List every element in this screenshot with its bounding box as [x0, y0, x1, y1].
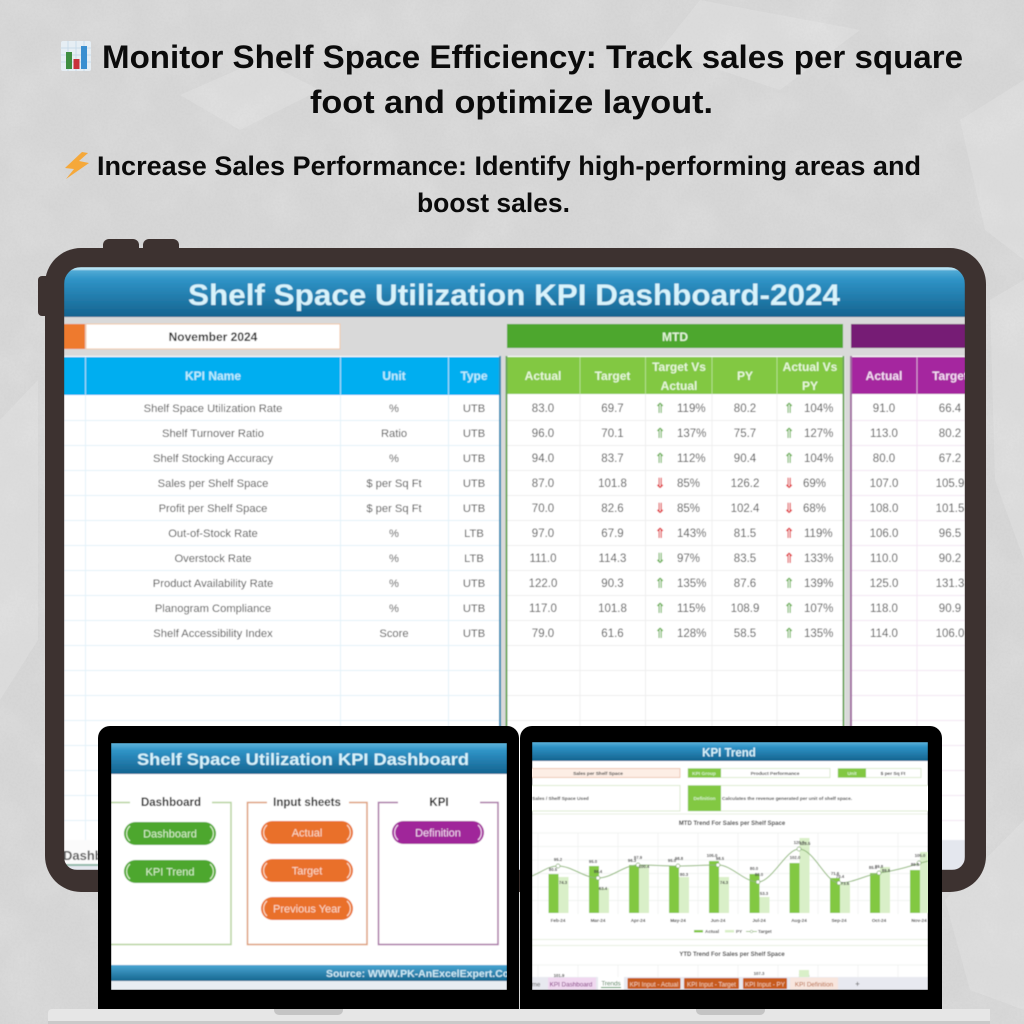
- formula and definition: Sales / Shelf Space Used: [532, 796, 589, 802]
- data labels: 74.3: [720, 880, 729, 885]
- data labels: 63.4: [599, 886, 608, 891]
- YTD table: 90.2: [939, 553, 961, 565]
- MTD table: Actual: [661, 379, 697, 393]
- source band: Source: WWW.PK-AnExcelExpert.Com: [326, 968, 519, 980]
- MTD table: 101.8: [598, 478, 627, 490]
- MTD table: 139%: [804, 578, 833, 590]
- month axis labels: Feb-24: [551, 918, 566, 923]
- MTD table: 102.4: [731, 503, 760, 515]
- title band: KPI Trend: [702, 748, 756, 760]
- MTD table: 101.8: [598, 603, 627, 615]
- sheet tabs: KPI Input - Actual: [630, 982, 678, 988]
- KPI info table: %: [389, 603, 399, 615]
- MTD table: 61.6: [601, 628, 624, 640]
- data labels: 100.4: [639, 864, 650, 869]
- KPI info table: Ratio: [381, 428, 407, 440]
- bars: Actual: [548, 861, 920, 913]
- MTD table: 143%: [677, 528, 706, 540]
- panel: Input sheets: Input sheets: [273, 797, 341, 809]
- YTD trend chart: [532, 952, 928, 978]
- panel: Dashboard: Dashboard: [141, 797, 201, 809]
- MTD table: 58.5: [734, 628, 756, 640]
- MTD table: Target Vs: [652, 360, 706, 374]
- KPI info table: Overstock Rate: [174, 553, 252, 565]
- status arrows: ⇑: [783, 576, 795, 592]
- selectors: Product Performance: [751, 771, 800, 777]
- selectors: [530, 768, 921, 778]
- formula and definition: Definition: [693, 796, 716, 802]
- data labels: 80.0: [755, 872, 764, 877]
- title band: [64, 267, 965, 317]
- status arrows: ⇓: [783, 501, 795, 517]
- MTD table: 108.9: [731, 603, 759, 615]
- button: Target: Target: [292, 866, 322, 878]
- KPI info table: UTB: [463, 478, 485, 490]
- formula and definition: Calculates the revenue generated per unit of shelf space.: [722, 796, 852, 802]
- month axis labels: Jun-24: [711, 918, 726, 923]
- MTD table: [505, 355, 846, 726]
- MTD table: 70.1: [601, 428, 624, 440]
- YTD table: 96.5: [939, 528, 961, 540]
- data labels: 80.5: [549, 867, 558, 872]
- button: Actual: [261, 821, 353, 844]
- data labels: 105.0: [915, 853, 926, 858]
- status arrows: ⇑: [654, 626, 666, 642]
- title band: Shelf Space Utilization KPI Dashboard-2024: [188, 279, 840, 312]
- MTD trend chart: MTD Trend For Sales per Shelf Space: [679, 821, 786, 827]
- status arrows: ⇓: [783, 476, 795, 492]
- status arrows: ⇑: [654, 576, 666, 592]
- YTD table: 131.3: [936, 578, 964, 590]
- KPI info table: %: [389, 578, 399, 590]
- button: Definition: [392, 821, 484, 844]
- KPI info table: %: [389, 553, 399, 565]
- data labels: 89.8: [882, 868, 891, 873]
- selectors: $ per Sq Ft: [881, 771, 906, 777]
- KPI info table: $ per Sq Ft: [366, 503, 423, 515]
- YTD trend chart: 101.9: [554, 973, 565, 978]
- YTD table: 106.0: [936, 628, 964, 640]
- data labels: 80.0: [750, 866, 759, 871]
- MTD table: 67.9: [601, 528, 624, 540]
- MTD table: PY: [737, 369, 753, 383]
- MTD table: 117.0: [529, 603, 557, 615]
- sheet tabs: KPI Dashboard: [550, 982, 593, 988]
- KPI info table: Product Availability Rate: [153, 578, 273, 590]
- MTD table: 119%: [804, 528, 833, 540]
- data labels: 95.2: [554, 857, 563, 862]
- data labels: 71.6: [831, 871, 840, 876]
- MTD table: 87.0: [532, 478, 554, 490]
- panel: Dashboard: [111, 797, 231, 944]
- month axis labels: Nov-24: [911, 918, 927, 923]
- MTD table: 96.0: [532, 428, 554, 440]
- YTD table: 108.0: [870, 503, 898, 515]
- button: Previous Year: Previous Year: [273, 904, 341, 916]
- KPI info table: Out-of-Stock Rate: [168, 528, 258, 540]
- MTD table: PY: [802, 379, 818, 393]
- data labels: 73.6: [841, 881, 850, 886]
- data labels: 105.0: [707, 853, 718, 858]
- MTD table: 90.4: [734, 453, 757, 465]
- status arrows: [654, 401, 795, 642]
- MTD table: 69.7: [601, 403, 624, 415]
- main dashboard screen: [63, 267, 968, 870]
- sheet tabs: [532, 977, 928, 990]
- laptop right: KPI trend screen: [520, 726, 942, 1009]
- KPI info table: %: [389, 403, 399, 415]
- status arrows: ⇑: [654, 451, 666, 467]
- MTD table: Actual: [525, 369, 561, 383]
- KPI info table: Unit: [382, 369, 406, 383]
- MTD banner: MTD: [662, 330, 688, 344]
- month axis labels: Jul-24: [752, 918, 766, 923]
- selectors: Sales per Shelf Space: [573, 771, 623, 777]
- sheet tabs: Trends: [601, 980, 621, 988]
- MTD table: Actual Vs: [783, 360, 838, 374]
- tablet frame: [38, 239, 986, 892]
- MTD table: 112%: [677, 453, 706, 465]
- MTD table: 97%: [677, 553, 700, 565]
- KPI info table: UTB: [463, 603, 485, 615]
- KPI info table: UTB: [463, 428, 485, 440]
- month axis labels: Mar-24: [591, 918, 606, 923]
- laptop left: navigation screen: [98, 726, 519, 1009]
- YTD table: 118.0: [870, 603, 898, 615]
- KPI info table: $ per Sq Ft: [366, 478, 423, 490]
- YTD table: [849, 355, 965, 821]
- sheet tabs: +: [855, 980, 860, 988]
- KPI info table: Score: [379, 628, 409, 640]
- status arrows: ⇑: [654, 401, 666, 417]
- KPI info table: Shelf Turnover Ratio: [162, 428, 264, 440]
- KPI info table: %: [389, 453, 399, 465]
- YTD trend chart: 108.5: [799, 973, 810, 978]
- button: Dashboard: Dashboard: [143, 828, 197, 840]
- heading: monitor shelf space efficiency: foot and optimize layout.: [310, 84, 713, 120]
- heading: monitor shelf space efficiency: [61, 39, 963, 120]
- status arrows: ⇑: [783, 601, 795, 617]
- MTD table: 90.3: [601, 578, 624, 590]
- YTD table: 114.0: [870, 628, 898, 640]
- button: KPI Trend: KPI Trend: [146, 866, 194, 878]
- MTD table: 80.2: [734, 403, 756, 415]
- data labels: 98.8: [675, 856, 684, 861]
- legend: Target: [758, 929, 772, 934]
- legend: Actual: [705, 929, 719, 934]
- month axis labels: Oct-24: [872, 918, 887, 923]
- status arrows: ⇓: [654, 501, 666, 517]
- MTD banner: [507, 324, 843, 348]
- MTD table: 94.0: [532, 453, 554, 465]
- month axis labels: [551, 918, 927, 923]
- MTD table: 75.7: [734, 428, 756, 440]
- data labels: 120.0: [794, 840, 805, 845]
- data labels: 96.3: [628, 858, 637, 863]
- sheet tab strip: [63, 840, 965, 870]
- button: Definition: Definition: [415, 828, 461, 840]
- title band: [111, 743, 507, 774]
- MTD table: 137%: [677, 428, 706, 440]
- YTD trend chart: YTD Trend For Sales per Shelf Space: [679, 952, 785, 958]
- KPI info table: Planogram Compliance: [155, 603, 271, 615]
- KPI info table: UTB: [463, 628, 485, 640]
- button: KPI Trend: [124, 860, 216, 883]
- MTD table: 128%: [677, 628, 706, 640]
- button: Target: [261, 859, 353, 882]
- formula and definition: [530, 786, 933, 811]
- panel: KPI: [378, 797, 498, 944]
- MTD table: 122.0: [529, 578, 557, 590]
- data labels: 102.0: [790, 855, 801, 860]
- MTD table: 87.6: [734, 578, 756, 590]
- MTD table: 83.5: [734, 553, 756, 565]
- sheet tab strip: Dashboard: [63, 848, 131, 863]
- KPI info table: KPI Name: [185, 369, 241, 383]
- YTD table: 125.0: [870, 578, 898, 590]
- MTD table: 119%: [677, 403, 706, 415]
- month selector: [64, 324, 340, 349]
- MTD table: 97.0: [532, 528, 554, 540]
- data labels: 128.5: [800, 841, 811, 846]
- YTD table: 110.0: [870, 553, 898, 565]
- YTD table: 80.0: [873, 453, 895, 465]
- selectors: KPI Group: [692, 771, 716, 777]
- MTD table: 115%: [677, 603, 706, 615]
- status arrows: ⇑: [783, 551, 795, 567]
- MTD table: 83.0: [532, 403, 554, 415]
- bars: PY: [558, 838, 930, 913]
- MTD table: 85%: [677, 503, 700, 515]
- status arrows: ⇑: [654, 526, 666, 542]
- data labels: 80.3: [680, 872, 689, 877]
- title band: Shelf Space Utilization KPI Dashboard: [137, 750, 469, 769]
- MTD table: 70.0: [532, 503, 554, 515]
- data labels: 89.8: [911, 862, 920, 867]
- MTD trend chart: [532, 821, 930, 934]
- line: Target: [532, 849, 928, 883]
- MTD table: 85%: [677, 478, 700, 490]
- YTD table: 66.4: [939, 403, 962, 415]
- heading: increase sales performance: Increase Sales Performance: Identify high-performing areas and: [97, 151, 921, 181]
- YTD table: 80.2: [939, 428, 961, 440]
- heading: increase sales performance: boost sales.: [417, 188, 570, 218]
- YTD trend chart: 107.3: [754, 971, 765, 976]
- YTD banner: [851, 324, 965, 348]
- source band: [111, 965, 519, 990]
- MTD table: 114.3: [599, 553, 626, 565]
- sheet tabs: KPI Definition: [795, 982, 834, 988]
- MTD table: 83.7: [601, 453, 624, 465]
- status arrows: ⇓: [654, 476, 666, 492]
- MTD table: 69%: [803, 478, 826, 490]
- MTD table: 104%: [804, 403, 833, 415]
- KPI info table: UTB: [463, 453, 485, 465]
- KPI info table: UTB: [463, 578, 485, 590]
- YTD table: 113.0: [870, 428, 898, 440]
- KPI info table: Profit per Shelf Space: [159, 503, 267, 515]
- MTD table: 127%: [804, 428, 833, 440]
- MTD table: 79.0: [532, 628, 554, 640]
- KPI info table: Shelf Stocking Accuracy: [153, 453, 273, 465]
- legend: PY: [736, 929, 742, 934]
- status arrows: ⇑: [654, 426, 666, 442]
- icon: lightning bolt emoji: [65, 152, 89, 179]
- month axis labels: Sep-24: [831, 918, 847, 923]
- data labels: [549, 840, 926, 896]
- sheet tabs: KPI Input - PY: [745, 982, 786, 988]
- KPI info table: LTB: [464, 528, 484, 540]
- status arrows: ⇑: [783, 426, 795, 442]
- MTD table: 126.2: [731, 478, 759, 490]
- data labels: 85.0: [869, 865, 878, 870]
- KPI info table: Type: [460, 369, 488, 383]
- YTD table: Target: [932, 369, 968, 383]
- data labels: 95.0: [589, 859, 598, 864]
- month axis labels: Apr-24: [631, 918, 646, 923]
- data labels: 89.8: [875, 864, 884, 869]
- data labels: 95.0: [668, 858, 677, 863]
- YTD table: 90.9: [939, 603, 961, 615]
- laptop base left and right: [48, 1009, 990, 1024]
- KPI info table: %: [389, 528, 399, 540]
- data labels: 86.4: [594, 869, 603, 874]
- panel: Input sheets: [248, 797, 367, 944]
- YTD table: 67.2: [939, 453, 961, 465]
- KPI info table: UTB: [463, 503, 485, 515]
- status arrows: ⇓: [654, 551, 666, 567]
- data labels: 74.3: [559, 880, 568, 885]
- MTD table: 133%: [804, 553, 833, 565]
- MTD table: Target: [595, 369, 630, 383]
- month axis labels: Aug-24: [791, 918, 807, 923]
- sheet tabs: KPI Input - Target: [687, 982, 736, 988]
- MTD table: 135%: [804, 628, 833, 640]
- data labels: 53.3: [760, 891, 769, 896]
- MTD table: 104%: [804, 453, 833, 465]
- selectors: Unit: [847, 771, 857, 777]
- month axis labels: May-24: [670, 918, 686, 923]
- YTD table: 105.9: [936, 478, 964, 490]
- YTD table: 106.0: [870, 528, 898, 540]
- data labels: 97.9: [634, 855, 643, 860]
- button: Actual: Actual: [292, 828, 322, 840]
- data labels: 98.5: [716, 856, 725, 861]
- MTD table: 111.0: [529, 553, 557, 565]
- status arrows: ⇑: [783, 626, 795, 642]
- KPI info table: [64, 356, 501, 870]
- button: Dashboard: [124, 822, 216, 845]
- button: Previous Year: [261, 897, 353, 920]
- YTD table: 91.0: [873, 403, 895, 415]
- YTD table: 101.5: [936, 503, 964, 515]
- month selector: November 2024: [169, 330, 258, 344]
- YTD table: 107.0: [870, 478, 898, 490]
- sheet tabs: me: [532, 982, 541, 988]
- KPI info table: LTB: [464, 553, 484, 565]
- status arrows: ⇑: [654, 601, 666, 617]
- MTD table: 135%: [677, 578, 706, 590]
- MTD table: 68%: [803, 503, 826, 515]
- MTD table: 82.6: [601, 503, 624, 515]
- icon: bar chart emoji: [61, 41, 91, 71]
- KPI info table: Shelf Space Utilization Rate: [144, 403, 282, 415]
- MTD table: 81.5: [734, 528, 756, 540]
- data labels: 70.4: [836, 874, 845, 879]
- legend: [694, 929, 772, 934]
- status arrows: ⇑: [783, 401, 795, 417]
- heading: monitor shelf space efficiency: Monitor Shelf Space Efficiency: Track sales per square: [102, 39, 963, 75]
- title band: [532, 742, 928, 761]
- YTD table: Actual: [866, 369, 902, 383]
- MTD table: 107%: [804, 603, 833, 615]
- KPI info table: Shelf Accessibility Index: [153, 628, 273, 640]
- panel: KPI: KPI: [429, 797, 449, 809]
- status arrows: ⇑: [783, 451, 795, 467]
- KPI info table: UTB: [463, 403, 485, 415]
- status arrows: ⇑: [783, 526, 795, 542]
- KPI info table: Sales per Shelf Space: [158, 478, 268, 490]
- heading: increase sales performance: [65, 151, 921, 218]
